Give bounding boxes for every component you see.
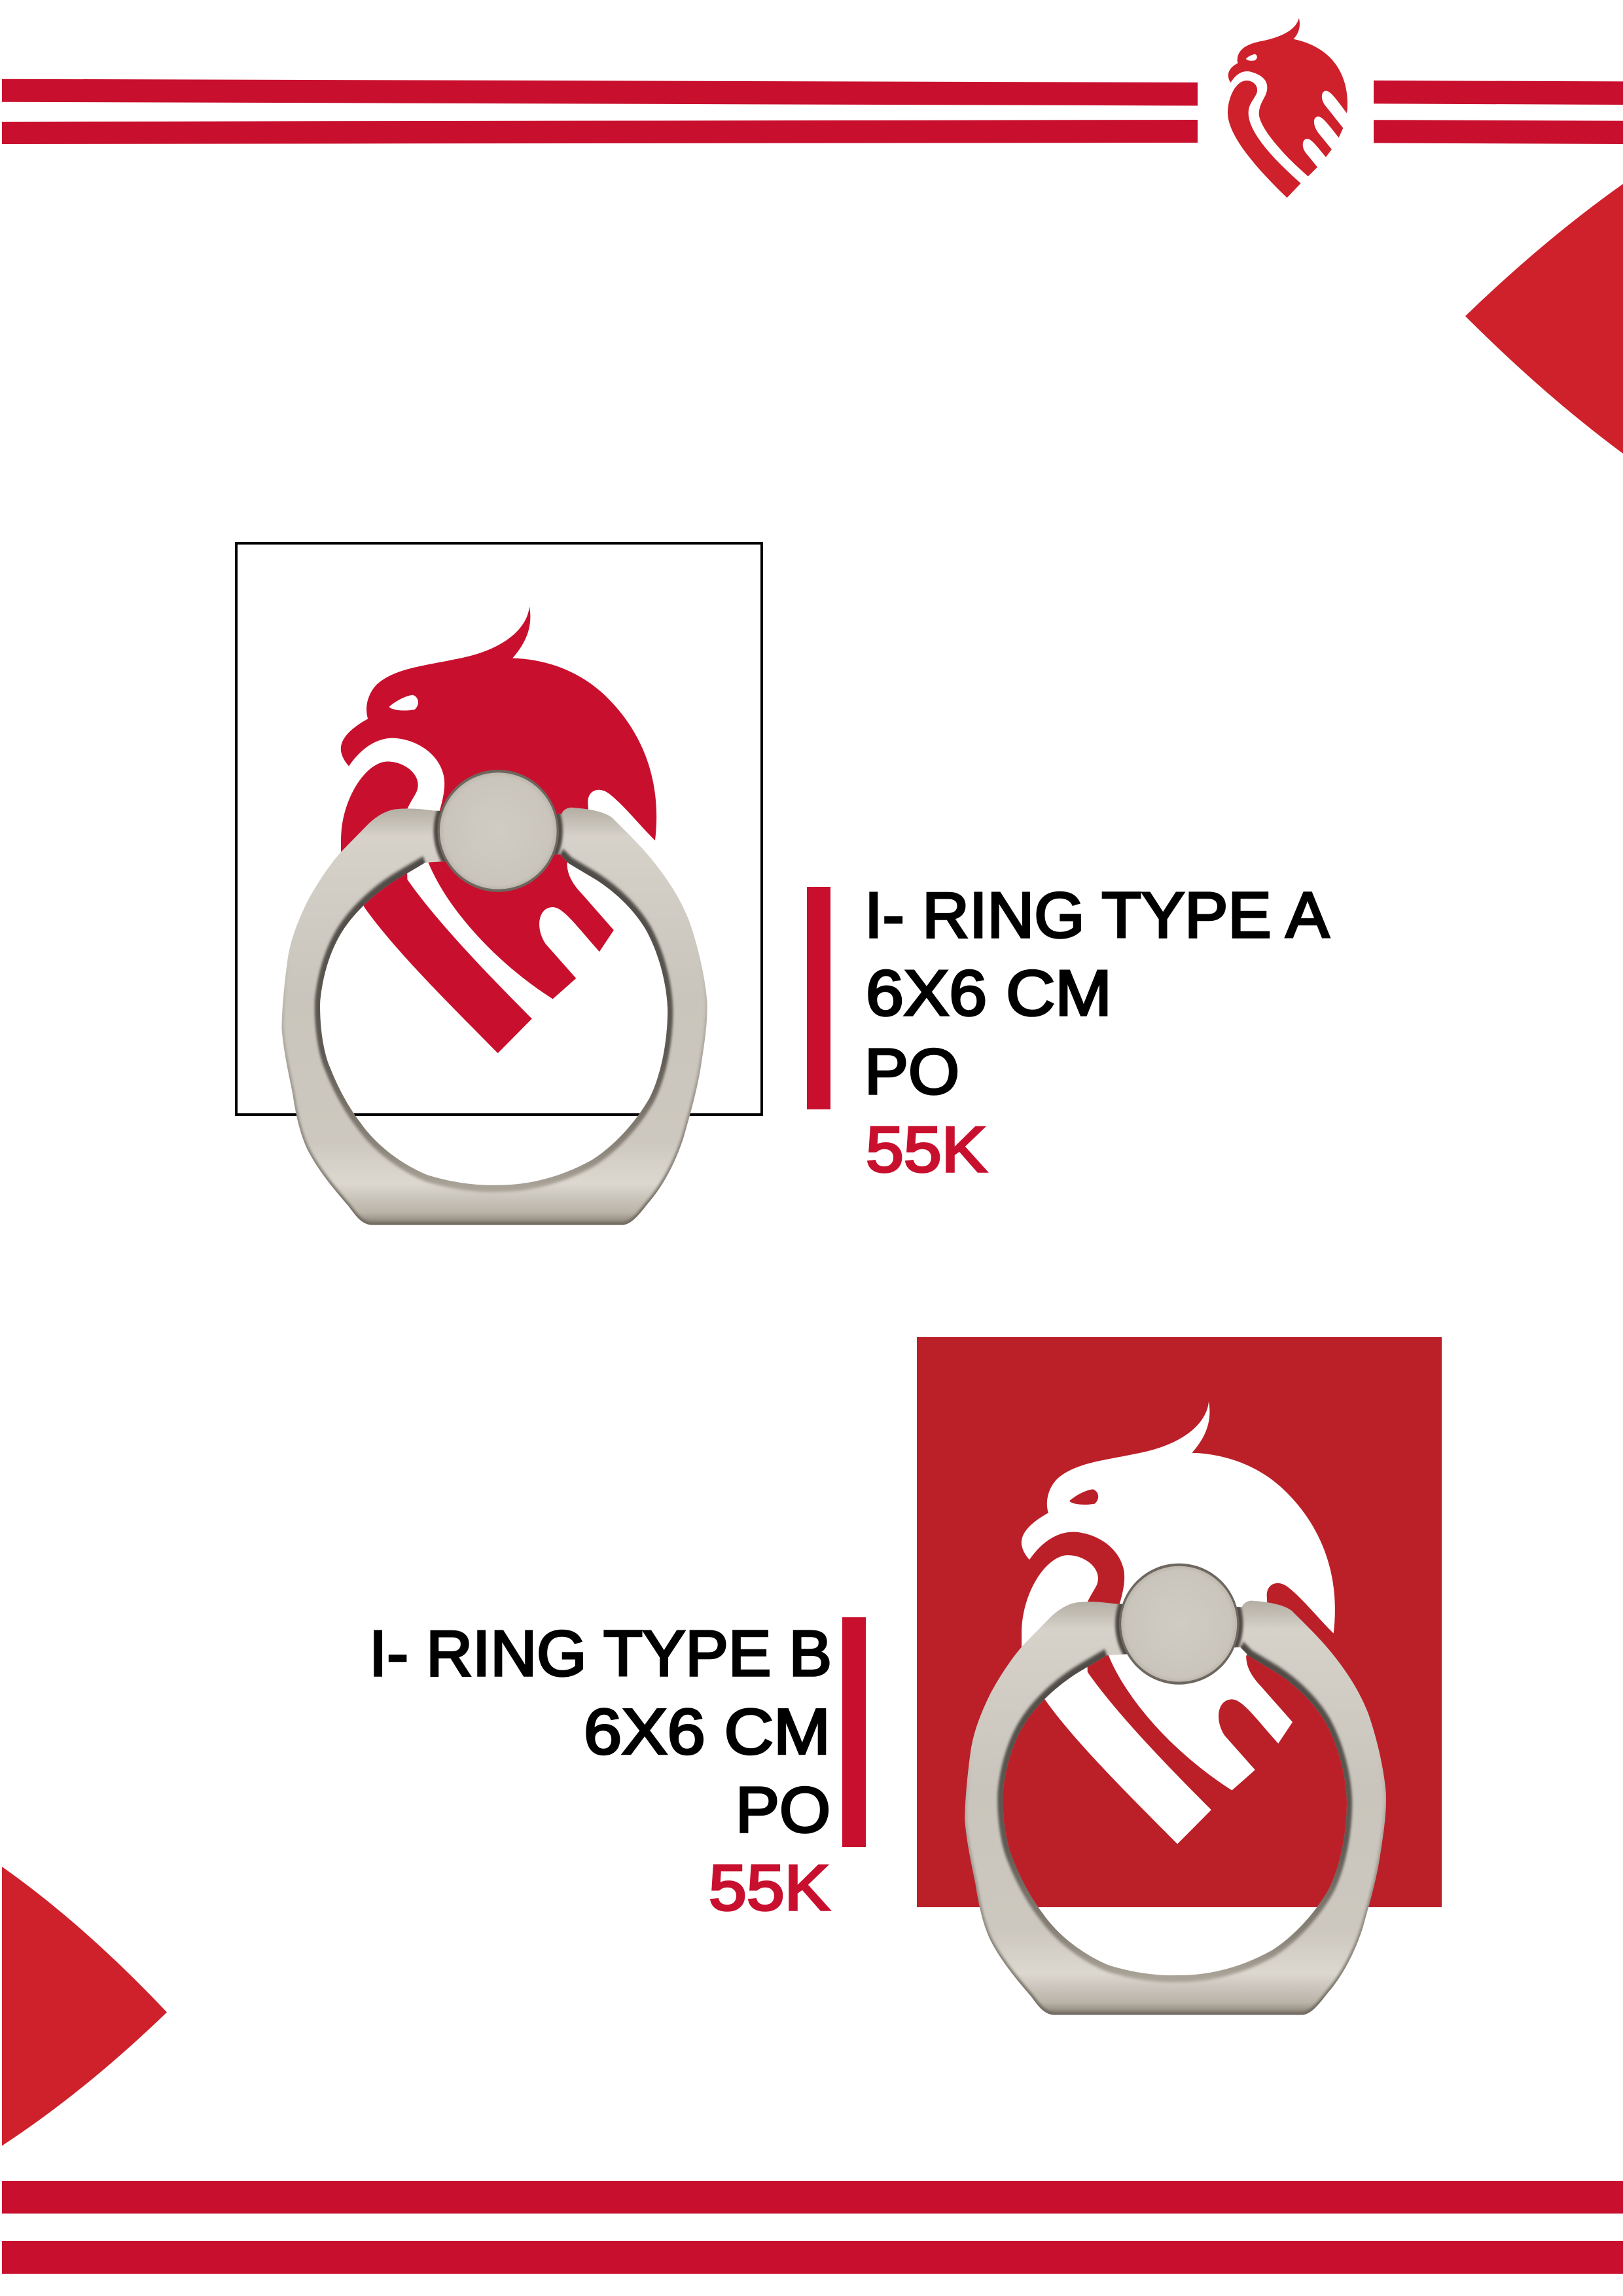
text block: ring type B xyxy=(369,1617,832,1924)
accent bar type A xyxy=(807,887,830,1109)
accent bar type B xyxy=(842,1617,866,1847)
text block: ring type B: I- RING TYPE B xyxy=(369,1617,832,1689)
header stripes left xyxy=(2,79,1198,144)
icon: red eagle logo on card xyxy=(341,606,656,1053)
text block: ring type A xyxy=(865,879,1330,1185)
text block: ring type B: PO xyxy=(736,1774,830,1846)
panel: ring type B product image xyxy=(917,1337,1442,2015)
text block: ring type B: 6X6 CM xyxy=(584,1695,830,1767)
decorative corner shape bottom left xyxy=(2,1867,167,2145)
white card outline xyxy=(236,543,762,1115)
decorative corner shape top right xyxy=(1465,184,1623,454)
icon: metal phone ring A xyxy=(282,769,707,1225)
icon: header eagle logo xyxy=(1228,18,1347,198)
text block: ring type B: 55K xyxy=(709,1852,830,1924)
icon: white eagle logo on card xyxy=(1022,1401,1335,1844)
text block: ring type A: PO xyxy=(865,1035,959,1107)
panel: ring type A product image xyxy=(236,543,762,1225)
footer stripes xyxy=(2,2181,1623,2274)
text block: ring type A: I- RING TYPE A xyxy=(865,879,1330,951)
header stripes right xyxy=(1374,81,1623,144)
text block: ring type A: 55K xyxy=(866,1113,987,1185)
text block: ring type A: 6X6 CM xyxy=(866,957,1112,1029)
red card xyxy=(917,1337,1442,1907)
icon: metal phone ring B xyxy=(965,1563,1386,2015)
